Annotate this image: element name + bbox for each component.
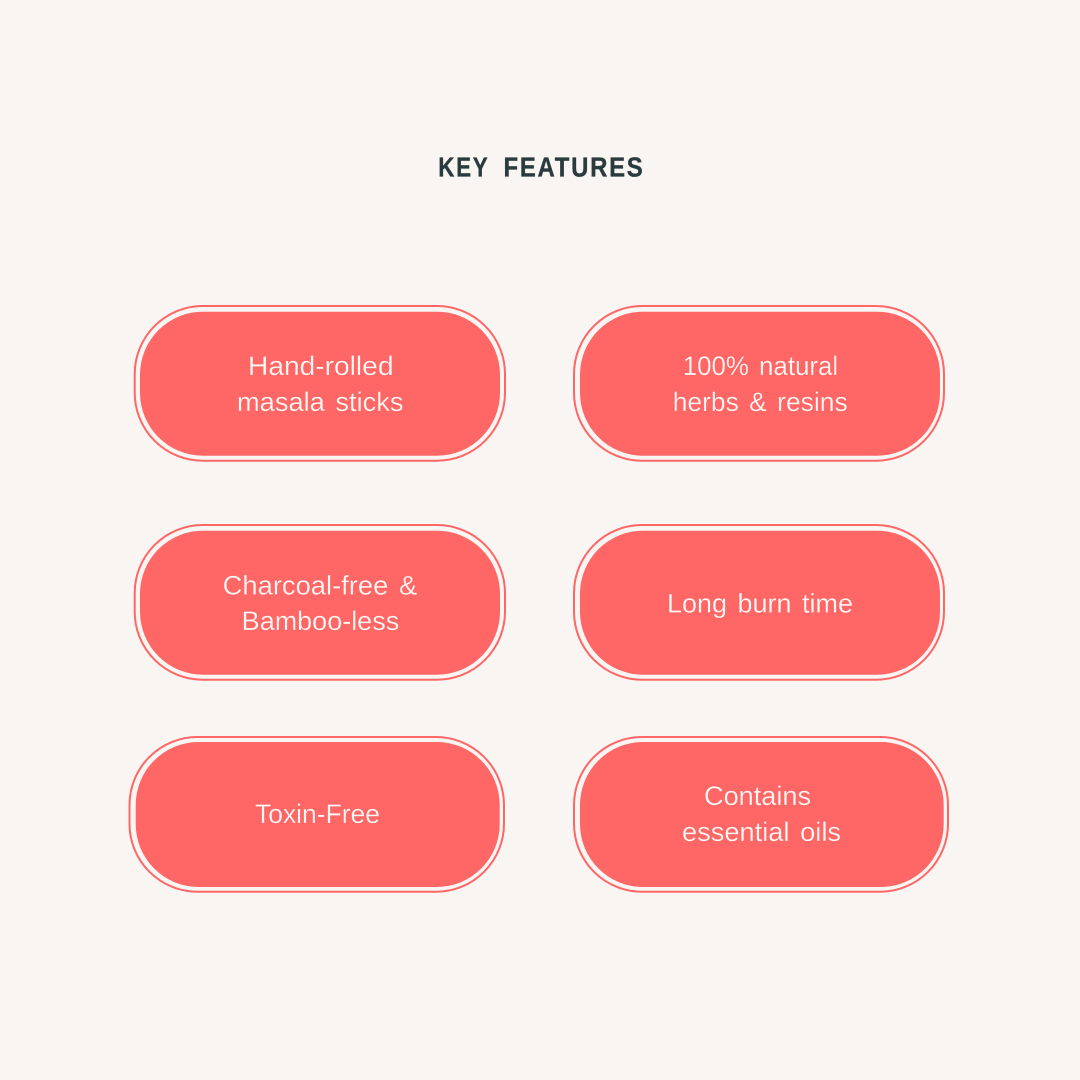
feature text: contains essential oils: Contains: [704, 781, 811, 811]
feature text: long burn time: Long burn time: [667, 589, 853, 619]
title: [438, 152, 644, 182]
feature text: toxin-free: Toxin-Free: [255, 799, 380, 829]
panel: charcoal-free and bamboo-less: [135, 525, 505, 680]
feature text: hand-rolled masala sticks: [237, 351, 404, 417]
feature text: hand-rolled masala sticks: Hand-rolled: [248, 351, 394, 381]
title: FEATURES: [504, 152, 644, 182]
feature text: contains essential oils: [682, 781, 841, 847]
panel: toxin-free: [130, 737, 504, 892]
feature text: charcoal-free and bamboo-less: Bamboo-less: [242, 606, 399, 636]
feature text: charcoal-free and bamboo-less: [223, 570, 418, 636]
feature text: natural herbs and resins: herbs & resins: [673, 387, 848, 417]
feature text: natural herbs and resins: 100% natural: [683, 351, 838, 381]
panel: hand-rolled masala sticks: [135, 306, 505, 461]
panel: contains essential oils: [574, 737, 948, 892]
feature text: natural herbs and resins: [673, 351, 848, 417]
feature text: contains essential oils: essential oils: [682, 817, 841, 847]
panel: long burn time: [574, 525, 944, 680]
feature text: hand-rolled masala sticks: masala sticks: [237, 387, 404, 417]
feature text: charcoal-free and bamboo-less: Charcoal-free &: [223, 570, 418, 600]
title: KEY: [438, 152, 489, 182]
panel: natural herbs and resins: [574, 306, 944, 461]
